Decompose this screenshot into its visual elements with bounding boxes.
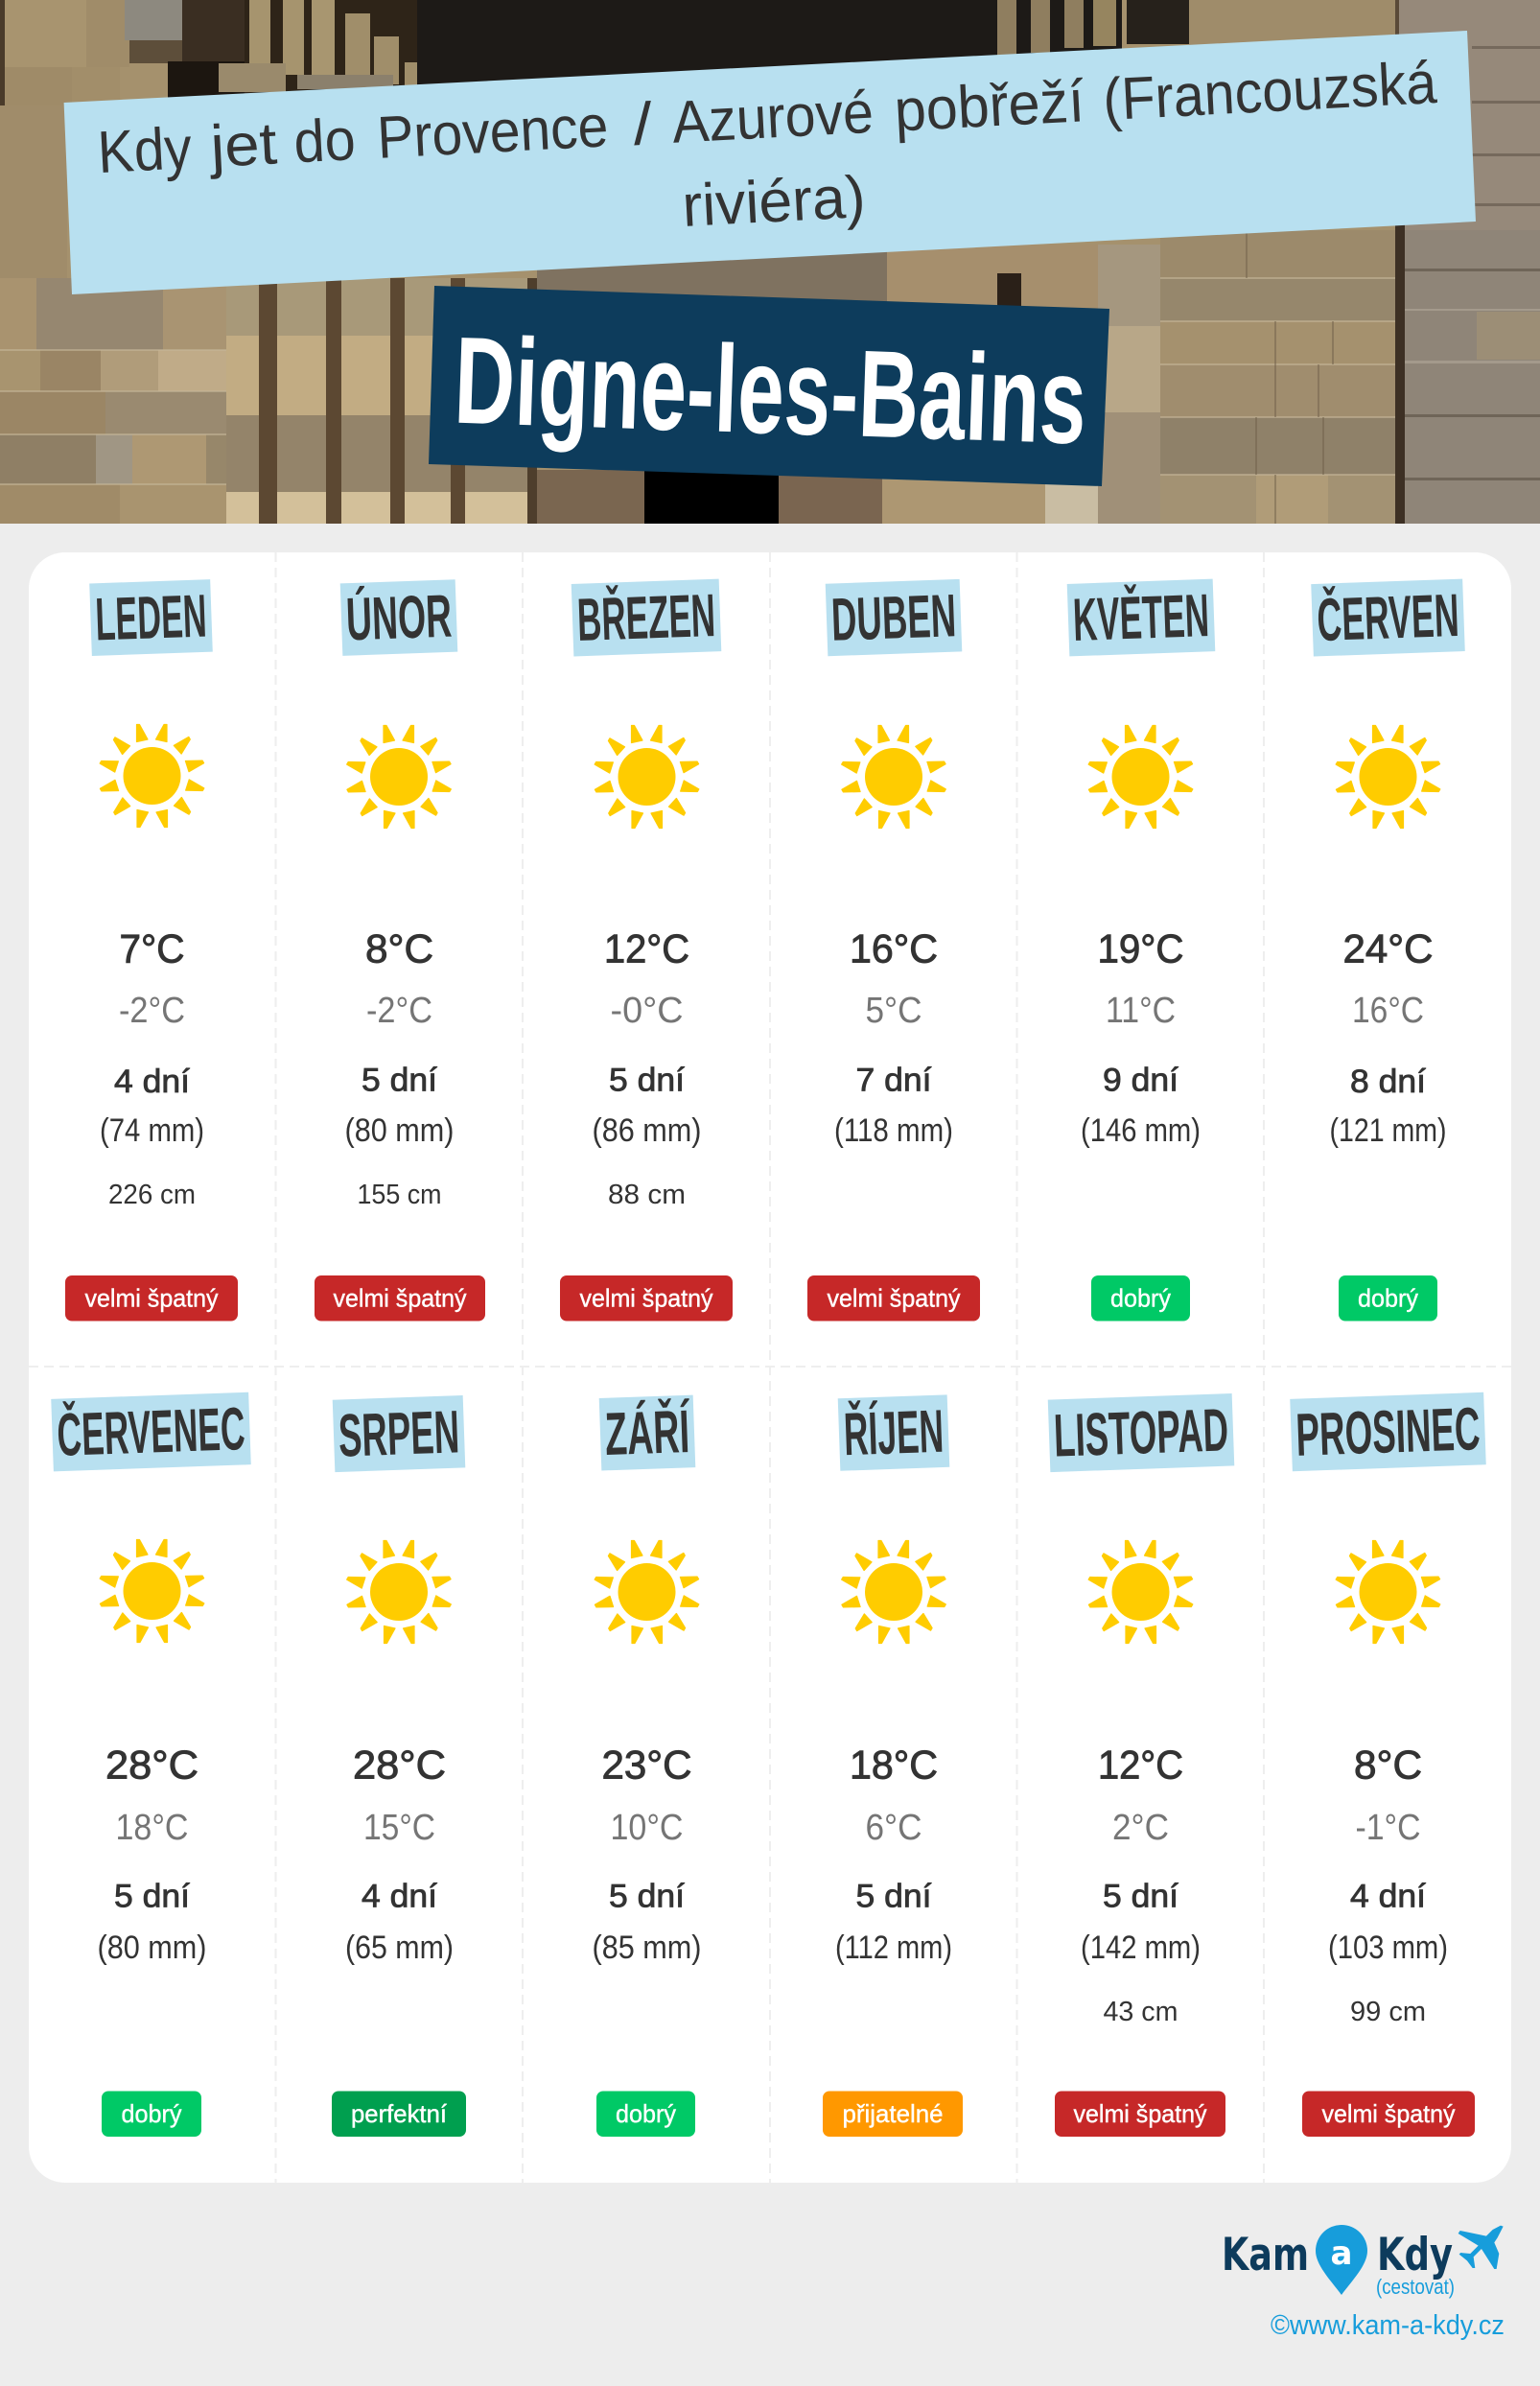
snow: 99 cm — [1350, 1997, 1426, 2027]
subtitle line 1: Kdy — [96, 115, 194, 186]
snow: 43 cm — [1103, 1997, 1178, 2027]
header photo: stone portal — [0, 0, 1540, 524]
rain days: 5 dní — [114, 1878, 191, 1914]
month: březen — [560, 579, 733, 1322]
precipitation: (112 mm) — [835, 1930, 952, 1966]
heading: KVĚTEN: KVĚTEN — [1072, 581, 1210, 654]
low temperature: 11°C — [1106, 991, 1176, 1031]
high temperature: 28°C — [105, 1742, 198, 1788]
title: Digne-les-Bains: Digne-les-Bains — [453, 312, 1088, 470]
website link: ©www.kam-a-kdy.cz — [1271, 2310, 1505, 2341]
rain days: 4 dní — [114, 1064, 191, 1100]
heading: ZÁŘÍ: ZÁŘÍ — [604, 1397, 691, 1468]
high temperature: 18°C — [850, 1742, 938, 1788]
panel: climate table — [29, 552, 1511, 2183]
badge: velmi špatný — [807, 1275, 980, 1322]
high temperature: 23°C — [602, 1742, 692, 1788]
pin letter a: a — [1331, 2234, 1352, 2273]
rain days: 9 dní — [1103, 1063, 1179, 1099]
title banner — [429, 286, 1109, 486]
precipitation: (80 mm) — [345, 1112, 455, 1149]
high temperature: 8°C — [365, 926, 433, 971]
badge: velmi špatný — [1302, 2091, 1475, 2137]
icon: map pin — [1316, 2225, 1367, 2295]
heading: DUBEN: DUBEN — [830, 582, 957, 654]
low temperature: 2°C — [1112, 1808, 1169, 1848]
icon: sun — [1336, 725, 1440, 829]
badge: velmi špatný: velmi špatný — [579, 1283, 713, 1312]
high temperature: 12°C — [604, 926, 689, 971]
low temperature: -1°C — [1356, 1808, 1421, 1848]
heading: ÚNOR — [340, 579, 457, 656]
badge: velmi špatný: velmi špatný — [827, 1283, 961, 1312]
heading: ČERVENEC: ČERVENEC — [56, 1394, 246, 1469]
subtitle banner — [64, 31, 1476, 294]
badge: perfektní: perfektní — [351, 2099, 448, 2128]
badge: dobrý — [1091, 1275, 1190, 1322]
heading: KVĚTEN — [1067, 579, 1215, 656]
heading: LISTOPAD — [1048, 1393, 1234, 1472]
heading: BŘEZEN — [572, 579, 721, 656]
snow: 88 cm — [608, 1180, 686, 1210]
heading: ŘÍJEN — [838, 1394, 949, 1471]
high temperature: 28°C — [353, 1742, 446, 1788]
month: leden — [65, 579, 238, 1322]
low temperature: 16°C — [1352, 991, 1424, 1031]
icon: sun — [595, 725, 699, 829]
precipitation: (80 mm) — [98, 1930, 207, 1966]
rain days: 4 dní — [1350, 1878, 1427, 1914]
heading: SRPEN — [333, 1395, 465, 1472]
heading: ČERVENEC — [51, 1392, 251, 1471]
month: únor — [315, 579, 485, 1322]
badge: dobrý — [102, 2091, 201, 2137]
low temperature: -0°C — [610, 991, 683, 1031]
wordmark: Kam: Kam — [1222, 2229, 1309, 2281]
icon: sun — [347, 1540, 451, 1644]
month: říjen — [823, 1394, 963, 2137]
badge: velmi špatný — [1055, 2091, 1225, 2137]
rain days: 5 dní — [362, 1063, 438, 1099]
icon: sun — [100, 1540, 204, 1642]
rain days: 5 dní — [1103, 1878, 1179, 1914]
high temperature: 12°C — [1098, 1742, 1183, 1788]
rain days: 7 dní — [855, 1063, 932, 1099]
heading: LEDEN — [89, 579, 213, 656]
heading: BŘEZEN: BŘEZEN — [576, 581, 716, 654]
rain days: 5 dní — [609, 1878, 686, 1914]
heading: ČERVEN — [1311, 579, 1465, 657]
heading: DUBEN — [826, 579, 962, 656]
badge: velmi špatný: velmi špatný — [1074, 2099, 1206, 2128]
logo: Kam a Kdy — [1222, 2225, 1504, 2299]
precipitation: (86 mm) — [593, 1112, 702, 1149]
high temperature: 19°C — [1097, 926, 1183, 971]
subtitle line 1: (Francouzská — [1102, 50, 1438, 133]
heading: ÚNOR: ÚNOR — [345, 583, 453, 653]
heading: ŘÍJEN: ŘÍJEN — [843, 1397, 945, 1468]
subtitle line 1: Provence — [376, 93, 610, 172]
precipitation: (121 mm) — [1329, 1112, 1446, 1149]
precipitation: (142 mm) — [1081, 1930, 1201, 1966]
subtitle line 1: / — [631, 91, 655, 158]
heading: LEDEN: LEDEN — [94, 582, 208, 654]
badge: velmi špatný: velmi špatný — [334, 1283, 466, 1312]
snow: 155 cm — [357, 1180, 441, 1210]
high temperature: 24°C — [1342, 926, 1433, 971]
precipitation: (146 mm) — [1081, 1112, 1201, 1149]
badge: dobrý: dobrý — [1358, 1283, 1418, 1312]
high temperature: 8°C — [1354, 1742, 1422, 1788]
month: duben — [807, 579, 980, 1322]
badge: velmi špatný: velmi špatný — [84, 1283, 219, 1312]
low temperature: -2°C — [119, 991, 185, 1031]
icon: sun — [595, 1540, 699, 1644]
icon: sun — [1088, 1540, 1193, 1644]
subtitle line 1: pobřeží — [893, 68, 1085, 145]
rain days: 8 dní — [1350, 1064, 1427, 1100]
badge: velmi špatný: velmi špatný — [1321, 2099, 1456, 2128]
badge: dobrý — [596, 2091, 695, 2137]
heading: ZÁŘÍ — [599, 1395, 695, 1470]
month: prosinec — [1290, 1392, 1486, 2137]
subtitle line 1 — [96, 50, 1438, 186]
subtitle line 1: Azurové — [670, 80, 875, 156]
heading: LISTOPAD: LISTOPAD — [1053, 1396, 1229, 1470]
icon: sun — [842, 725, 945, 829]
high temperature: 16°C — [850, 926, 938, 971]
month: červenec — [51, 1392, 251, 2137]
month: listopad — [1048, 1393, 1234, 2137]
precipitation: (74 mm) — [100, 1112, 204, 1149]
low temperature: 18°C — [115, 1808, 188, 1848]
low temperature: -2°C — [366, 991, 432, 1031]
icon: sun — [1088, 725, 1193, 829]
precipitation: (118 mm) — [834, 1112, 953, 1149]
icon: sun — [100, 725, 204, 827]
low temperature: 5°C — [865, 991, 922, 1031]
badge: dobrý: dobrý — [1110, 1283, 1171, 1312]
low temperature: 10°C — [610, 1808, 683, 1848]
month: květen — [1067, 579, 1215, 1322]
rain days: 5 dní — [609, 1063, 686, 1099]
subtitle line 1: do — [292, 106, 357, 175]
precipitation: (85 mm) — [593, 1930, 702, 1966]
badge: velmi špatný — [315, 1275, 485, 1322]
icon: sun — [347, 725, 451, 829]
icon: sun — [842, 1540, 945, 1644]
precipitation: (65 mm) — [345, 1930, 454, 1966]
rain days: 4 dní — [362, 1878, 438, 1914]
heading: SRPEN: SRPEN — [338, 1398, 460, 1470]
subtitle line 2: riviéra) — [681, 164, 867, 240]
icon: airplane — [1458, 2226, 1504, 2269]
precipitation: (103 mm) — [1328, 1930, 1448, 1966]
month: červen — [1311, 579, 1465, 1322]
badge: dobrý: dobrý — [616, 2099, 676, 2128]
icon: sun — [1336, 1540, 1440, 1644]
badge: přijatelné — [823, 2091, 963, 2137]
wordmark: Kdy: Kdy — [1377, 2229, 1453, 2281]
tagline: (cestovat): (cestovat) — [1376, 2275, 1455, 2299]
high temperature: 7°C — [119, 926, 184, 971]
low temperature: 6°C — [865, 1808, 922, 1848]
rain days: 5 dní — [855, 1878, 932, 1914]
badge: přijatelné: přijatelné — [842, 2099, 944, 2128]
snow: 226 cm — [108, 1180, 196, 1210]
badge: velmi špatný — [560, 1275, 733, 1322]
subtitle line 1: jet — [207, 110, 278, 180]
badge: dobrý: dobrý — [121, 2099, 182, 2128]
low temperature: 15°C — [363, 1808, 435, 1848]
badge: velmi špatný — [65, 1275, 238, 1322]
month: září — [593, 1395, 702, 2137]
badge: dobrý — [1339, 1275, 1437, 1322]
white card — [29, 552, 1511, 2183]
badge: perfektní — [332, 2091, 466, 2137]
month: srpen — [332, 1395, 466, 2137]
